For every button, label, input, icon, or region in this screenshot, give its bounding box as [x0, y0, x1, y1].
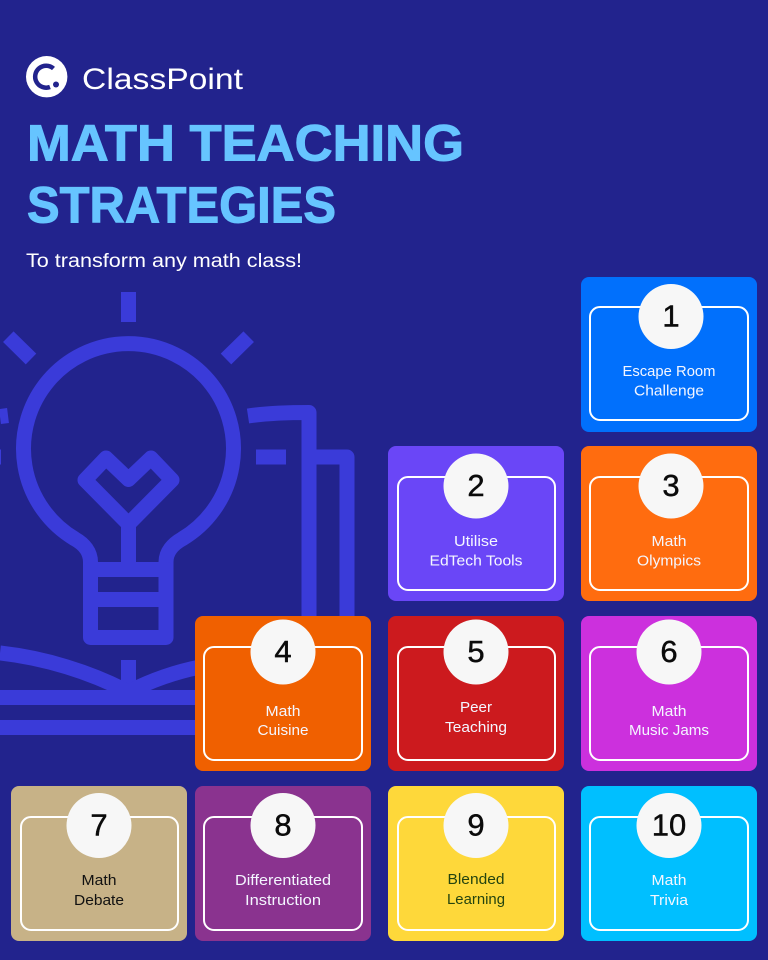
- card 6: Music Jams: [629, 723, 709, 739]
- card 9: 9: [467, 808, 485, 842]
- card 6: [581, 616, 757, 771]
- card 5: Peer: [460, 700, 492, 716]
- card 7: 7: [90, 808, 108, 842]
- card 10: Trivia: [650, 893, 689, 909]
- card 6: Math: [652, 704, 686, 720]
- card 7: Debate: [74, 893, 124, 909]
- card 10: Math: [652, 873, 686, 889]
- card 5: [388, 616, 564, 771]
- logo wordmark: ClassPoint: [82, 63, 244, 96]
- title: [27, 114, 464, 234]
- card 7: [11, 786, 187, 941]
- card 2: [388, 446, 564, 601]
- card 4: 4: [274, 634, 292, 669]
- card 8: Differentiated: [235, 873, 331, 889]
- card 9: Blended: [448, 872, 504, 888]
- card 3: Olympics: [637, 554, 701, 570]
- card 10: [581, 786, 757, 941]
- card 2: EdTech Tools: [430, 554, 522, 570]
- icon: ClassPoint logo: [26, 56, 67, 97]
- title: MATH TEACHING: [27, 114, 464, 172]
- card 2: 2: [467, 468, 485, 503]
- card 1: 1: [662, 298, 680, 334]
- card 8: [195, 786, 371, 941]
- card 4: [195, 616, 371, 771]
- card 2: Utilise: [454, 534, 498, 550]
- card 9: Learning: [447, 892, 505, 908]
- card 3: Math: [652, 534, 686, 550]
- title: STRATEGIES: [27, 176, 336, 234]
- card 3: 3: [662, 468, 680, 503]
- subtitle: To transform any math class!: [26, 251, 302, 272]
- icon: light bulb over open book: [0, 292, 347, 728]
- card 10: 10: [652, 808, 686, 842]
- card 1: Escape Room: [622, 364, 716, 380]
- card 4: Cuisine: [258, 723, 308, 739]
- card 9: [388, 786, 564, 941]
- card 6: 6: [660, 634, 678, 669]
- card 1: Challenge: [634, 384, 704, 400]
- card 8: Instruction: [245, 893, 321, 909]
- card 5: Teaching: [445, 720, 507, 736]
- card 8: 8: [274, 808, 292, 842]
- card 1: [581, 277, 757, 432]
- card 3: [581, 446, 757, 601]
- card 7: Math: [82, 873, 116, 889]
- card 5: 5: [467, 634, 485, 669]
- card 4: Math: [266, 704, 300, 720]
